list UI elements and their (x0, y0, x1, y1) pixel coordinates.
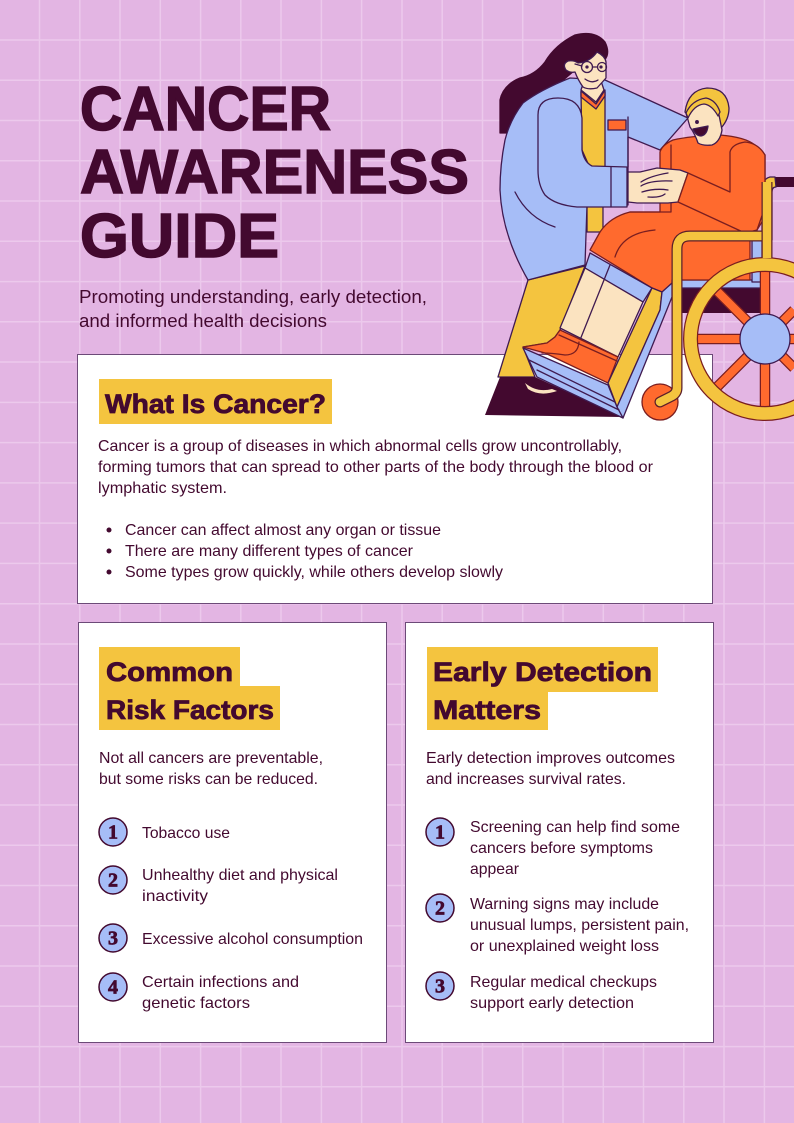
heading: early detection matters (427, 647, 658, 730)
shirt front (581, 92, 605, 168)
item 2: unusual lumps, persistent pain, (470, 917, 689, 934)
definition text (98, 438, 654, 497)
heading: what is cancer (99, 379, 332, 424)
heading: early detection matters: Matters (433, 695, 541, 725)
floor shadow (485, 377, 622, 417)
wheelchair handle (762, 177, 794, 240)
definition text: lymphatic system. (98, 480, 227, 497)
item 3: Regular medical checkups (470, 974, 657, 991)
subtitle: and informed health decisions (79, 311, 327, 331)
patient lap and torso (590, 135, 765, 292)
bullet list: There are many different types of cancer (125, 543, 414, 560)
bullet list: Some types grow quickly, while others develop slowly (125, 564, 503, 581)
patient foot (523, 330, 618, 383)
doctor sleeve (538, 98, 627, 207)
title: GUIDE (80, 202, 279, 271)
large wheel (690, 264, 794, 414)
item 4: Certain infections and (142, 974, 299, 991)
definition text: Cancer is a group of diseases in which abnormal cells grow uncontrollably, (98, 438, 622, 455)
item 2: or unexplained weight loss (470, 938, 659, 955)
item 4: 4 (108, 976, 118, 998)
intro text (426, 750, 675, 788)
subtitle: Promoting understanding, early detection, (79, 287, 427, 307)
item 2: 2 (435, 898, 445, 920)
item 1: 1 (435, 822, 445, 844)
bullet list: Cancer can affect almost any organ or tissue (125, 522, 441, 539)
intro text (99, 750, 323, 788)
panel: early detection matters (406, 622, 714, 1042)
intro text: Early detection improves outcomes (426, 750, 675, 767)
item 1: Screening can help find some (470, 819, 680, 836)
intro text: Not all cancers are preventable, (99, 750, 323, 767)
item 1 (99, 818, 230, 846)
item 3: Excessive alcohol consumption (142, 931, 363, 948)
item 1: cancers before symptoms (470, 840, 653, 857)
item 2: Warning signs may include (470, 896, 659, 913)
item 2: 2 (108, 870, 118, 892)
illustration: doctor with patient in wheelchair (485, 34, 794, 420)
item 1: 1 (108, 822, 118, 844)
wheelchair seat back (672, 236, 762, 313)
heading: what is cancer: What Is Cancer? (105, 389, 326, 419)
patient lower leg (560, 253, 652, 357)
collar (581, 90, 605, 109)
item 2 (426, 894, 689, 955)
title: CANCER (80, 75, 331, 144)
heading: common risk factors: Common (106, 657, 233, 687)
title (80, 75, 469, 271)
doctor neck and face (564, 52, 606, 102)
item 1 (426, 818, 680, 878)
doctor coat (500, 78, 688, 280)
wheelchair frame (660, 182, 767, 402)
item 4 (99, 973, 299, 1012)
item 3: support early detection (470, 995, 634, 1012)
patient sleeve (678, 142, 765, 233)
item 3: 3 (435, 976, 445, 998)
item 1: Tobacco use (142, 825, 230, 842)
coat pocket badge (608, 120, 626, 130)
doctor shirt (587, 205, 603, 232)
item 3 (99, 924, 363, 952)
item 2 (99, 866, 338, 905)
heading: common risk factors: Risk Factors (106, 695, 274, 725)
title: AWARENESS (80, 138, 469, 207)
doctor trousers (498, 266, 585, 377)
doctor shoe heel (525, 383, 557, 394)
heading: early detection matters: Early Detection (433, 657, 652, 687)
panel: common risk factors (78, 622, 386, 1042)
definition text: forming tumors that can spread to other parts of the body through the blood or (98, 459, 654, 476)
item 3 (426, 972, 657, 1012)
item 4: genetic factors (142, 995, 250, 1012)
patient hat (685, 88, 729, 129)
item 1: appear (470, 861, 520, 878)
patient face (686, 98, 722, 145)
footrest (523, 283, 672, 418)
intro text: but some risks can be reduced. (99, 771, 318, 788)
panel: what is cancer (78, 354, 712, 604)
item 3: 3 (108, 928, 118, 950)
heading: common risk factors (99, 647, 280, 730)
caster wheel (642, 384, 678, 420)
subtitle (79, 287, 427, 331)
item 2: Unhealthy diet and physical (142, 867, 338, 884)
hands (628, 168, 688, 203)
bullet list (106, 522, 503, 581)
item 2: inactivity (142, 888, 208, 905)
doctor hair (500, 34, 608, 133)
intro text: and increases survival rates. (426, 771, 626, 788)
